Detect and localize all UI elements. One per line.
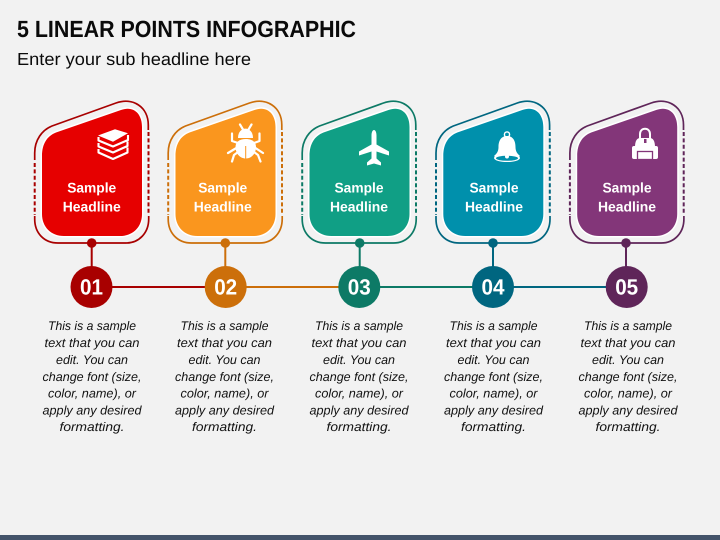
description 1: apply any desired [42,404,143,418]
description 5: change font (size, [578,370,678,384]
description 3 [310,319,410,434]
card fill 2 [176,109,276,236]
icon: backpack [632,129,658,160]
description 5: formatting. [596,420,660,434]
description 2: edit. You can [188,353,261,367]
description 3: text that you can [312,336,407,350]
description 4: change font (size, [444,370,543,384]
description 2 [175,319,275,434]
description 5: color, name), or [584,386,673,400]
panel: step 5 [570,101,684,434]
connector and dot 5 [621,238,631,268]
headline 5: Headline [598,199,656,215]
description 4: apply any desired [444,404,544,418]
description 1: change font (size, [42,370,142,384]
description 2: formatting. [192,420,257,434]
description 4: formatting. [461,420,526,434]
icon: plane [359,130,389,166]
description 4: text that you can [446,336,541,350]
headline 3: Sample [334,180,384,196]
card outline 3 [302,101,416,243]
number badge 3 [338,266,380,308]
panel: step 4 [436,101,550,434]
description 3: formatting. [326,420,392,434]
number badge 1: 01 [80,274,103,300]
connector and dot 2 [220,238,230,268]
icon: books [98,129,128,159]
icon: bell [494,132,520,162]
headline 5 [598,180,656,215]
description 2: apply any desired [175,404,275,418]
description 5 [578,319,679,434]
number badge 4: 04 [482,274,505,300]
description 1: color, name), or [48,386,137,400]
headline 1: Sample [67,180,116,196]
description 1: This is a sample [48,319,136,333]
headline 1: Headline [63,199,121,215]
card outline 1 [35,101,149,243]
description 4: This is a sample [450,319,538,333]
description 4: edit. You can [458,353,530,367]
card fill 4 [443,109,543,236]
connector and dot 1 [87,238,96,268]
description 4: color, name), or [450,386,538,400]
headline 4: Sample [470,180,519,196]
icon: bug [228,124,263,162]
number badge 2 [205,266,247,308]
description 5: apply any desired [578,404,679,418]
card outline 5 [570,101,684,243]
connector and dot 4 [488,238,498,268]
description 5: This is a sample [584,319,672,333]
description 3: color, name), or [315,386,404,400]
bottom bar [0,535,720,540]
headline 1 [63,180,121,215]
description 3: change font (size, [310,370,408,384]
card fill 5 [577,109,677,236]
description 5: text that you can [580,336,676,350]
card outline 2 [168,101,282,243]
headline 3: Headline [330,199,388,215]
panel: step 3 [302,101,416,434]
card outline 4 [436,101,550,243]
timeline connector segments [92,286,627,288]
number badge 4 [472,266,514,308]
panel: step 1 [35,101,149,434]
number badge 5 [606,266,648,308]
description 1: text that you can [44,336,140,350]
description 3: edit. You can [323,353,395,367]
connector and dot 3 [355,238,365,268]
description 1: edit. You can [56,353,128,367]
headline 2: Sample [198,180,247,196]
description 2: This is a sample [180,319,269,333]
number badge 1 [70,266,112,308]
number badge 5: 05 [615,274,638,300]
headline 2: Headline [194,199,252,215]
description 1: formatting. [60,420,124,434]
title: 5 LINEAR POINTS INFOGRAPHIC [17,16,356,42]
description 2: text that you can [177,336,272,350]
description 5: edit. You can [592,353,664,367]
panel: step 2 [168,101,282,434]
description 2: change font (size, [175,370,274,384]
headline 4 [465,180,523,215]
headline 3 [330,180,388,215]
number badge 3: 03 [348,274,371,300]
description 1 [42,319,143,434]
description 2: color, name), or [180,386,269,400]
card fill 1 [42,109,142,236]
description 4 [444,319,544,434]
subtitle: Enter your sub headline here [17,49,251,69]
headline 2 [194,180,252,215]
card fill 3 [310,109,410,236]
description 3: This is a sample [315,319,403,333]
headline 4: Headline [465,199,523,215]
description 3: apply any desired [310,404,410,418]
headline 5: Sample [602,180,652,196]
number badge 2: 02 [214,274,237,300]
